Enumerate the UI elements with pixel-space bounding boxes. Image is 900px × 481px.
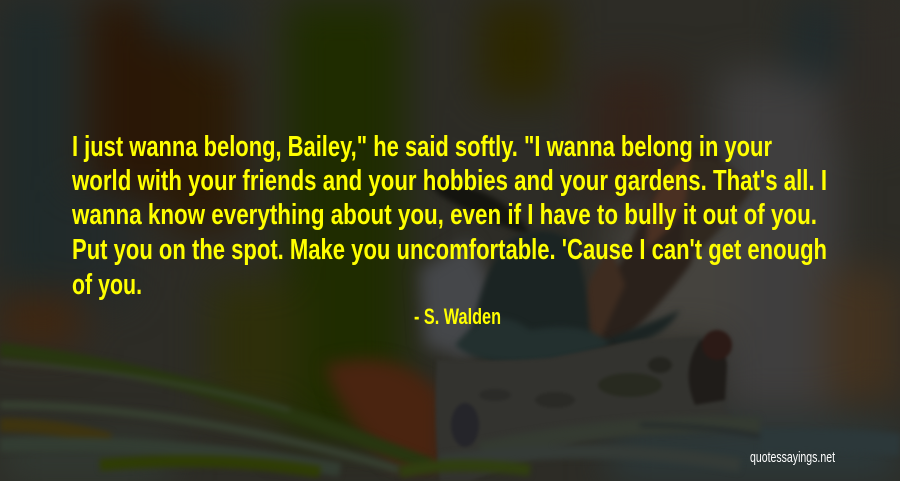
branch: [436, 330, 740, 481]
orange blur behind the log: [325, 359, 440, 470]
bird wing: [420, 149, 752, 350]
quote text: of you.: [72, 269, 142, 301]
grass blades: [0, 350, 430, 472]
quote text: [71, 131, 827, 301]
bird body: [470, 231, 680, 361]
hummingbird on a branch: [400, 149, 900, 481]
attribution: - S. Walden: [414, 304, 501, 329]
foreground blades over branch: [400, 424, 900, 472]
watermark: quotessayings.net: [750, 449, 836, 466]
